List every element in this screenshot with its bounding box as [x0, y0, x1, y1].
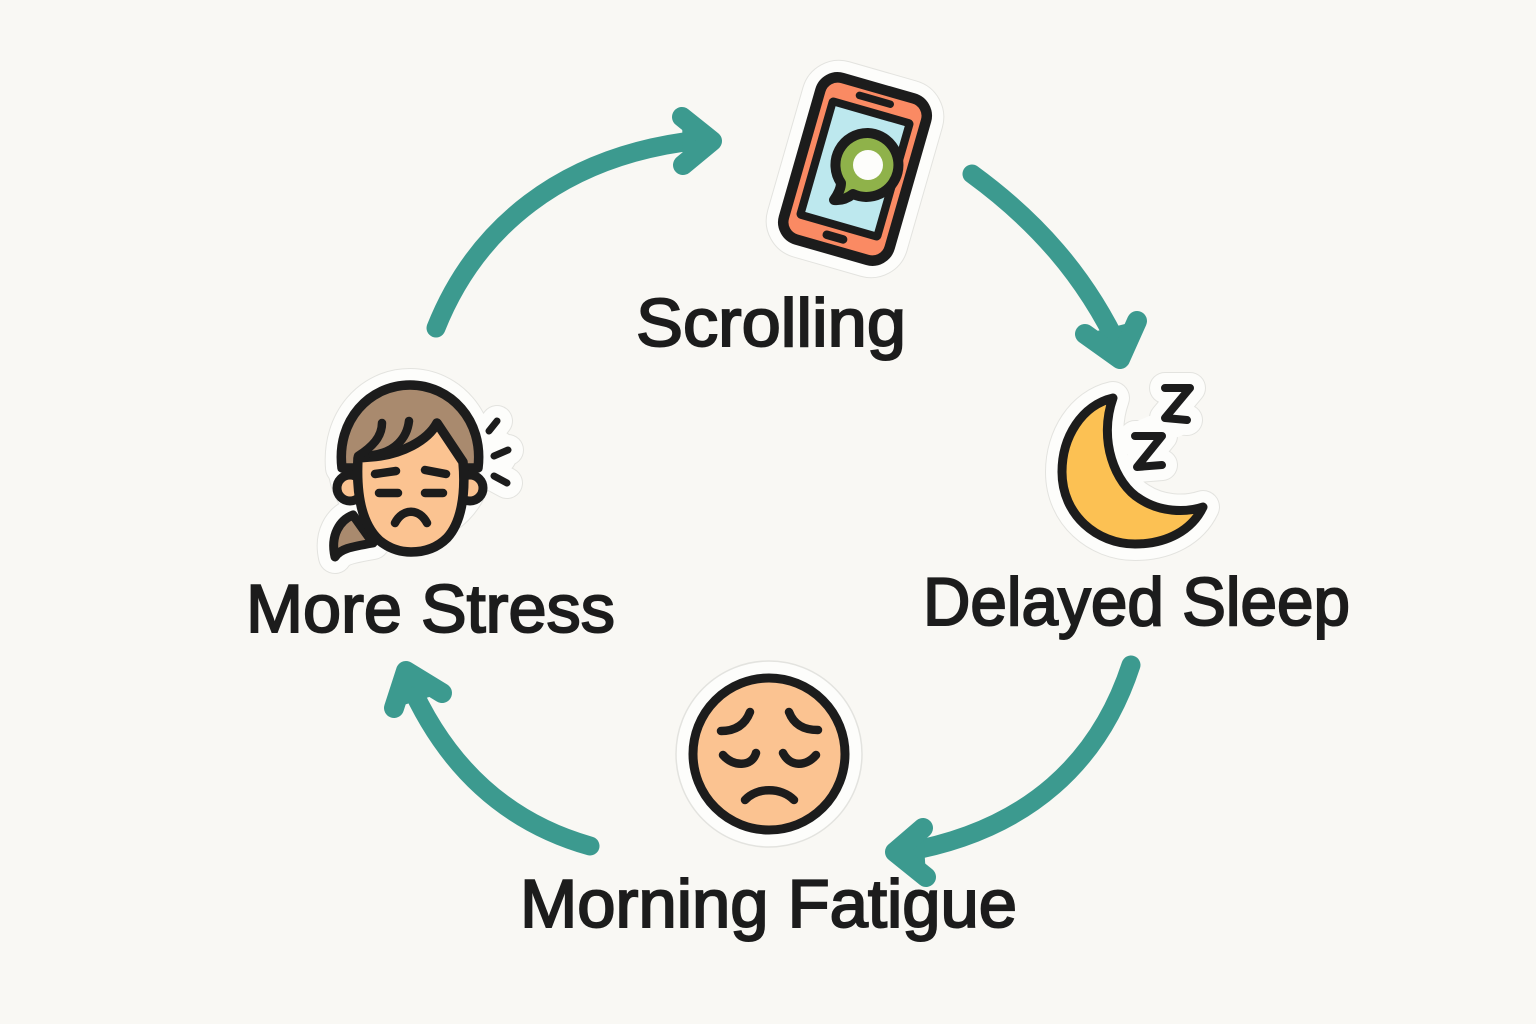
- icon: tired face: [676, 661, 862, 847]
- label: Morning Fatigue: Morning Fatigue: [520, 866, 1017, 942]
- arrow: delayed sleep to morning fatigue: [895, 665, 1131, 877]
- icon: crescent moon with Z letters: [1062, 388, 1203, 544]
- arrow: scrolling to delayed sleep: [972, 174, 1137, 359]
- arrow: morning fatigue to more stress: [394, 671, 590, 846]
- arrow: more stress to scrolling: [436, 117, 712, 328]
- icon: stressed woman: [334, 385, 518, 557]
- label: More Stress: More Stress: [246, 571, 615, 647]
- ponytail: [334, 515, 373, 557]
- label: Scrolling: Scrolling: [636, 285, 906, 361]
- hair: [341, 385, 479, 468]
- hair strands and features: [358, 421, 508, 523]
- icon: smartphone with chat bubble: [779, 73, 931, 265]
- face: [358, 423, 464, 552]
- ears: [337, 475, 363, 501]
- label: Delayed Sleep: Delayed Sleep: [923, 564, 1350, 640]
